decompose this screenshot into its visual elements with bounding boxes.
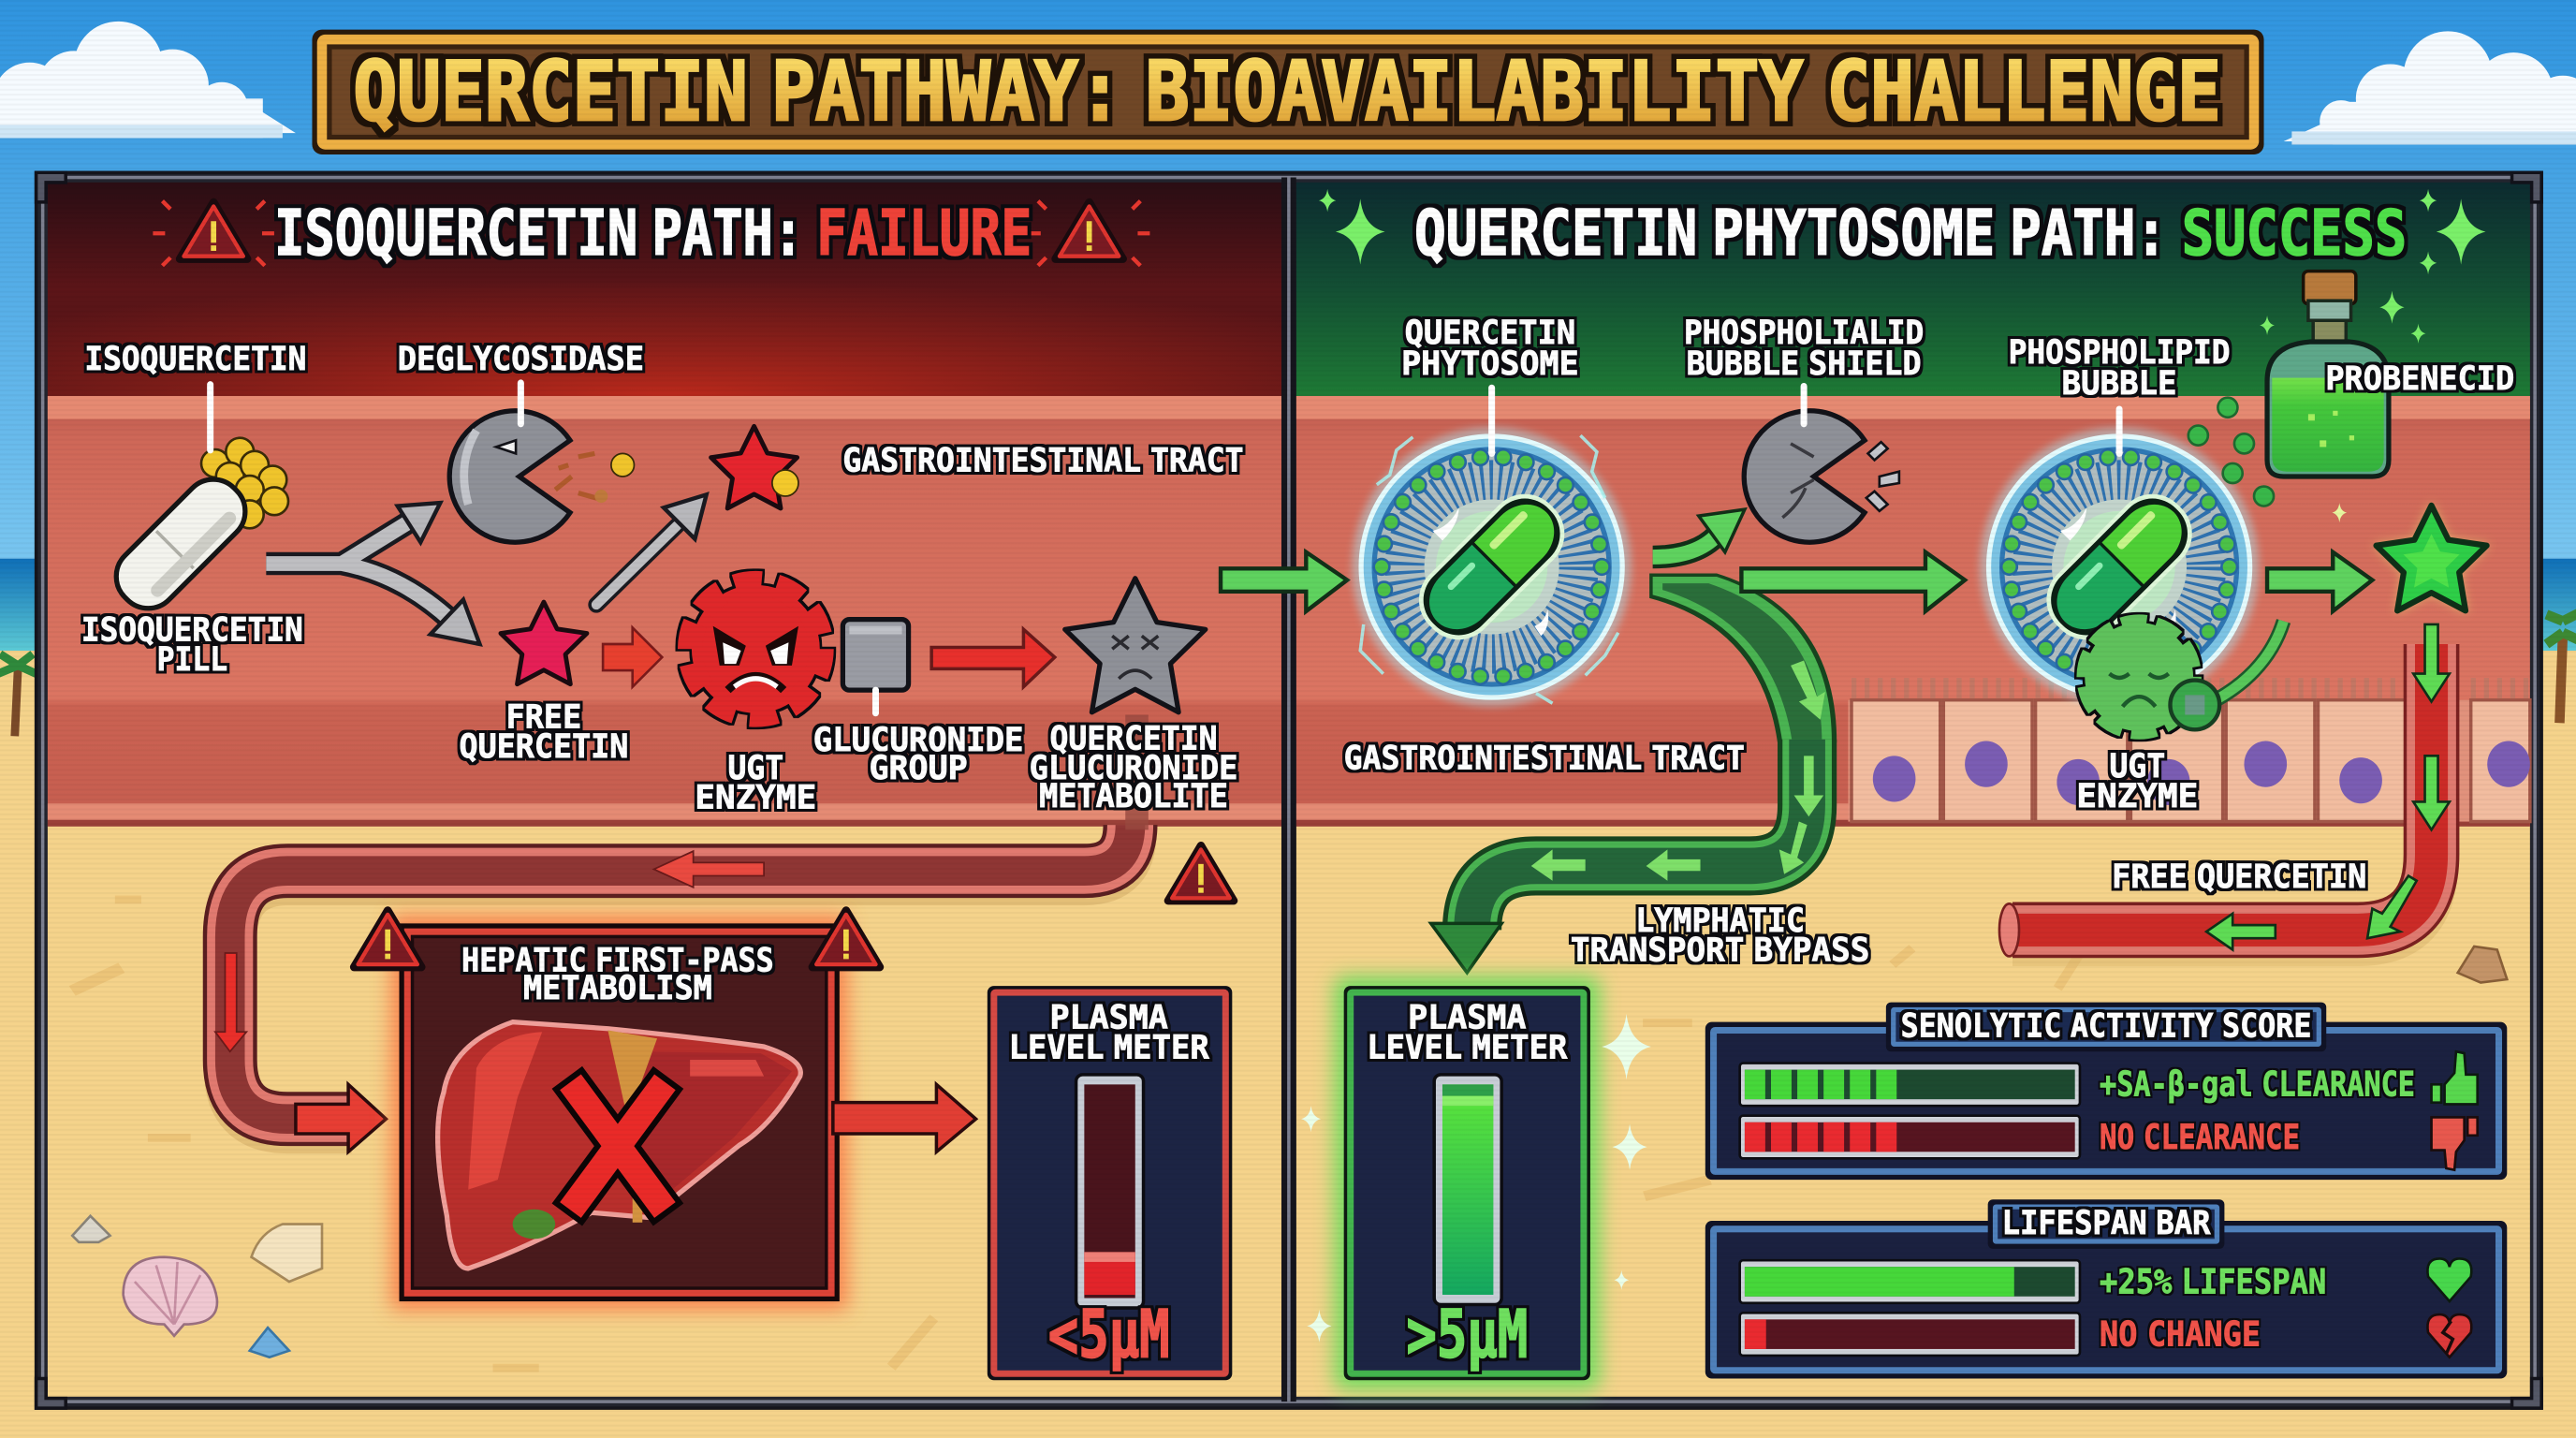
- left gastrointestinal tract: [48, 396, 1281, 827]
- label: plasma: [1009, 999, 1210, 1066]
- icon: phytosome bubble 1: [1352, 427, 1632, 707]
- pointer: shield: [1802, 386, 1806, 424]
- label: hepatic: METABOLISM: [523, 969, 712, 1007]
- sparkles by bottle: [2260, 291, 2425, 522]
- cloud left: [0, 22, 296, 138]
- label: GI tract right: GASTROINTESTINAL TRACT: [1344, 739, 1745, 777]
- icon: phospholipid shield pacman: [1744, 411, 1899, 542]
- right sand: [1296, 827, 2530, 1397]
- icon: phytosome bubble 2: [1980, 427, 2259, 707]
- label: metabolite: [1030, 719, 1237, 815]
- label: isoquercetin pill: ISOQUERCETIN: [81, 610, 303, 649]
- probenecid bubbles: [2188, 398, 2274, 506]
- pointer: bubble: [2117, 409, 2121, 453]
- warning: liver right: [812, 911, 880, 967]
- background: sky: [0, 0, 2576, 562]
- label: deglycosidase: DEGLYCOSIDASE: [398, 340, 644, 378]
- label: UGT enzyme: [695, 749, 816, 817]
- pebble: blue: [250, 1328, 289, 1357]
- heading: failure path: FAILURE: [816, 197, 1032, 270]
- label: free quercetin right: FREE QUERCETIN: [2112, 858, 2366, 896]
- arrow: to UGT: [603, 627, 662, 687]
- label: free quercetin: [460, 698, 628, 766]
- icon: green heart: [2427, 1258, 2471, 1301]
- label: phospholipid bubble: BUBBLE: [2062, 364, 2177, 403]
- label: probenecid: PROBENECID: [2325, 360, 2514, 398]
- cloud right: [2284, 31, 2576, 144]
- label: glucuronide group: GLUCURONIDE: [813, 721, 1023, 759]
- warning: pipe: [1168, 845, 1234, 901]
- icon: red star: [711, 426, 798, 508]
- arrow: bypass head: [1431, 923, 1501, 973]
- label: bubble shield: BUBBLE SHIELD: [1687, 345, 1922, 383]
- arrow: to metabolite: [931, 629, 1055, 687]
- label: UGT enzyme right: UGT: [2110, 747, 2165, 785]
- left header band: [48, 183, 1281, 396]
- bar: lifespan failure: [1740, 1313, 2080, 1356]
- red pipe to liver: [230, 825, 1131, 1127]
- label: phospholipid bubble: PHOSPHOLIPID: [2009, 333, 2231, 372]
- panel: plasma meter failure: [988, 986, 1232, 1380]
- title text: QUERCETIN PATHWAY: BIOAVAILABILITY CHALLENGE: [353, 44, 2221, 139]
- label: free quercetin: FREE: [506, 698, 581, 737]
- palm left: [0, 654, 37, 736]
- label: phospholipid bubble: [2009, 333, 2231, 403]
- enterocyte cells: [1848, 690, 2530, 822]
- icon: thumb down: [2432, 1117, 2478, 1170]
- left sand: [48, 827, 1281, 1397]
- pointer: isoquercetin: [209, 385, 212, 450]
- bar: clearance failure: [1740, 1116, 2080, 1158]
- tag: lifespan: LIFESPAN BAR: [2002, 1204, 2211, 1242]
- right gastrointestinal tract: [1296, 396, 2530, 827]
- label: UGT enzyme: UGT: [728, 749, 783, 787]
- arrow: star to red star: [596, 494, 707, 605]
- icon: probenecid bottle: [2267, 271, 2389, 477]
- label: plasma: PLASMA: [1050, 999, 1168, 1037]
- icon: green star: [2373, 502, 2490, 613]
- arrow: pipe flow down: [215, 953, 246, 1051]
- panel: hepatic first-pass: [391, 916, 848, 1310]
- label: lymphatic bypass: [1571, 902, 1869, 970]
- panel: lifespan: [1705, 1199, 2507, 1379]
- sand texture: [69, 896, 2085, 1372]
- icon: broken heart: [2427, 1314, 2471, 1357]
- heading: success path: SUCCESS: [2182, 197, 2407, 270]
- icon: free quercetin star: [501, 602, 587, 684]
- label: UGT enzyme right: ENZYME: [2076, 777, 2198, 815]
- label: UGT enzyme: ENZYME: [695, 779, 816, 817]
- icon: thumb up: [2432, 1051, 2478, 1104]
- shell: cream: [252, 1225, 322, 1282]
- bar: lifespan success: [1740, 1260, 2080, 1303]
- meter tube: [1076, 1075, 1144, 1308]
- label: plasma right: PLASMA: [1408, 999, 1526, 1037]
- label: glucuronide group: GROUP: [869, 749, 968, 787]
- label: lymphatic bypass: TRANSPORT BYPASS: [1571, 932, 1869, 970]
- panel: plasma meter success: [1334, 976, 1600, 1390]
- label: plasma: LEVEL METER: [1009, 1028, 1210, 1066]
- label: clearance green: +SA-β-gal CLEARANCE: [2100, 1064, 2415, 1105]
- heading: success path: QUERCETIN PHYTOSOME PATH:: [1414, 197, 2167, 270]
- label: quercetin phytosome: PHYTOSOME: [1401, 345, 1579, 383]
- arrow: branch: [266, 503, 479, 644]
- label: metabolite: METABOLITE: [1039, 777, 1228, 815]
- lymphatic bypass pipe: [1472, 574, 1837, 930]
- label: bubble shield: [1684, 314, 1924, 383]
- right header band: [1296, 183, 2530, 396]
- label: GI tract left: GASTROINTESTINAL TRACT: [842, 442, 1244, 480]
- arrow: liver to plasma: [833, 1084, 976, 1152]
- rock: [2458, 946, 2507, 983]
- bar: clearance success: [1740, 1064, 2080, 1106]
- shell: pink: [124, 1257, 217, 1336]
- value right: >5µM: [1406, 1297, 1528, 1373]
- value: <5µM: [1048, 1297, 1170, 1373]
- palm right: [2546, 611, 2576, 723]
- label: plasma right: [1367, 999, 1568, 1066]
- heading: failure path: ISOQUERCETIN PATH:: [274, 197, 803, 270]
- lightning sparks: [1360, 435, 1618, 703]
- label: plasma right: LEVEL METER: [1367, 1028, 1568, 1066]
- shell: gray: [72, 1216, 110, 1242]
- label: UGT enzyme right: [2076, 747, 2198, 815]
- arrows in vessel: [2206, 624, 2450, 949]
- red vessel: [2012, 644, 2432, 940]
- meter tube right: [1434, 1075, 1501, 1305]
- icon: metabolite gray star: [1065, 579, 1206, 829]
- icon: red x: [578, 1093, 657, 1199]
- icon: warning left 2: [1029, 201, 1149, 266]
- shells: [72, 1216, 322, 1357]
- icon: sparkle left: [1319, 189, 1385, 265]
- icon: deglycosidase: [449, 411, 634, 542]
- pointer: phytosome: [1490, 388, 1494, 453]
- label: free quercetin: QUERCETIN: [460, 727, 628, 766]
- arrows inside bypass: [1531, 661, 1825, 881]
- label: bubble shield: PHOSPHOLIALID: [1684, 314, 1924, 352]
- arrow: to bubble 2: [1741, 552, 1965, 611]
- arrow: to phytosome: [1221, 552, 1347, 611]
- label: lifespan green: +25% LIFESPAN: [2100, 1261, 2326, 1301]
- icon: glucuronide group: [842, 620, 909, 713]
- label: quercetin phytosome: QUERCETIN: [1405, 314, 1575, 352]
- vessel end cap: [1999, 903, 2019, 956]
- arrow: pipe flow left: [654, 851, 764, 888]
- arrow: into liver: [296, 1084, 386, 1152]
- icon: warning left 1: [153, 201, 274, 266]
- label: lymphatic bypass: LYMPHATIC: [1635, 902, 1805, 940]
- label: hepatic: [461, 941, 774, 1007]
- panel: phytosome path: [1296, 183, 2530, 1397]
- label: glucuronide group: [813, 721, 1023, 787]
- label: isoquercetin pill: [81, 610, 303, 679]
- label: isoquercetin pill: PILL: [157, 640, 227, 679]
- label: quercetin phytosome: [1401, 314, 1579, 383]
- title banner: [312, 30, 2264, 154]
- pointer: deglycosidase: [519, 383, 522, 424]
- icon: isoquercetin pill: [104, 438, 288, 621]
- panel: isoquercetin path: [48, 183, 1281, 1397]
- label: metabolite: QUERCETIN: [1050, 719, 1218, 757]
- tag: senolytic: SENOLYTIC ACTIVITY SCORE: [1901, 1006, 2311, 1045]
- icon: UGT enzyme inhibited: [2085, 621, 2284, 731]
- panel: senolytic score: [1705, 1003, 2507, 1180]
- label: hepatic: HEPATIC FIRST-PASS: [461, 941, 774, 979]
- arrow: to green star: [2267, 552, 2372, 611]
- background: sea: [0, 559, 2576, 654]
- warning: liver left: [354, 911, 421, 967]
- icon: sparkle right: [2420, 189, 2485, 274]
- icon: liver: [438, 1022, 800, 1269]
- yellow hex cluster: [201, 438, 288, 528]
- sparkles by meter: [1301, 1014, 1651, 1343]
- label: metabolite: GLUCURONIDE: [1030, 749, 1237, 787]
- label: no clearance: NO CLEARANCE: [2100, 1117, 2300, 1157]
- arrow: curved to shield: [1653, 509, 1745, 557]
- label: no change: NO CHANGE: [2100, 1313, 2261, 1354]
- label: isoquercetin: ISOQUERCETIN: [84, 340, 306, 378]
- icon: UGT enzyme red: [690, 583, 822, 714]
- background: sand: [0, 651, 2576, 1438]
